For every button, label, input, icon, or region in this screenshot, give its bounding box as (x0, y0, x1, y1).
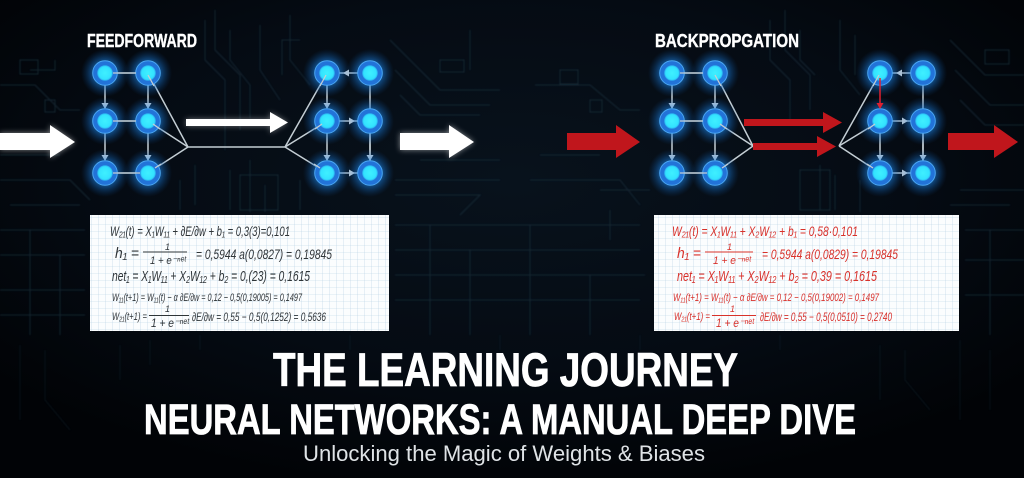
handwritten equations: backpropagation: W₂₁(t+1) = (674, 311, 710, 323)
handwritten equations: backpropagation: h₁ = (677, 245, 701, 262)
arrow: red connection (879, 78, 881, 108)
handwritten equations: feedforward: ∂E/∂w = 0,55 − 0,5(0,1252) = 0,5636 (192, 310, 326, 324)
handwritten equations: feedforward: = 0,5944 a(0,0827) = 0,19845 (196, 246, 332, 262)
title: THE LEARNING JOURNEY (273, 343, 738, 396)
handwritten equations: backpropagation: 1 + e⁻ⁿᵉᵗ (716, 316, 755, 330)
network connections: feedforward (105, 73, 370, 173)
arrow: white middle (186, 112, 288, 133)
handwritten equations: feedforward: 1 (165, 242, 170, 252)
handwritten equations: feedforward: h₁ = (115, 245, 139, 262)
handwritten equations: feedforward: W₁₁(t+1) = W₁₁(t) − α ∂E/∂w = 0,12 − 0,5(0,19005) = 0,1497 (112, 292, 303, 304)
handwritten equations: backpropagation: ∂E/∂w = 0,55 − 0,5(0,0510) = 0,2740 (760, 310, 892, 324)
network connections: backpropagation (672, 73, 923, 173)
panel: backpropagation equations (654, 215, 959, 331)
handwritten equations: backpropagation: net₁ = X₁W₁₁ + X₂W₁₂ + b₂ = 0,39 = 0,1615 (677, 268, 877, 285)
handwritten equations: backpropagation: W₁₁(t+1) = W₁₁(t) − α ∂E/∂w = 0,12 − 0,5(0,19002) = 0,1497 (673, 292, 880, 304)
tagline: Unlocking the Magic of Weights & Biases (303, 441, 705, 466)
handwritten equations: backpropagation: 1 + e⁻ⁿᵉᵗ (713, 255, 752, 267)
handwritten equations: feedforward: 1 + e⁻ⁿᵉᵗ (150, 255, 187, 267)
handwritten equations: feedforward: net₁ = X₁W₁₁ + X₂W₁₂ + b₂ = 0,(23) = 0,1615 (112, 268, 310, 285)
handwritten equations: feedforward: W₂₁(t) = X₁W₁₁ + ∂E/∂w + b₁ = 0,3(3)=0,101 (110, 223, 290, 239)
node link overlays: backpropagation (680, 73, 879, 173)
handwritten equations: backpropagation: W₂₁(t) = X₁W₁₁ + X₂W₁₂ + b₁ = 0,58·0,101 (672, 223, 858, 239)
arrow: red output (948, 125, 1018, 158)
neural network: backpropagation (648, 49, 947, 197)
heading: feedforward: FEEDFORWARD (87, 30, 197, 51)
nodes: feedforward (81, 49, 394, 197)
panel: feedforward equations (90, 215, 389, 331)
handwritten equations: backpropagation: 1 (730, 304, 735, 314)
arrow: white output (400, 125, 474, 158)
neural network: feedforward (81, 49, 394, 197)
heading: backpropagation: BACKPROPGATION (655, 30, 799, 51)
handwritten equations: feedforward: W₂₁(t+1) = (112, 311, 147, 323)
handwritten equations: feedforward: 1 (165, 304, 170, 314)
nodes: backpropagation (648, 49, 947, 197)
handwritten equations: backpropagation: = 0,5944 a(0,0829) = 0,19845 (762, 246, 898, 262)
arrow: red lower middle (753, 136, 836, 157)
arrow: red input (567, 125, 640, 158)
handwritten equations: backpropagation: 1 (727, 242, 732, 252)
handwritten equations: feedforward (110, 223, 332, 330)
handwritten equations: backpropagation (672, 223, 898, 330)
arrow: white input (0, 125, 75, 158)
arrow: red upper middle (744, 112, 842, 133)
node link overlays: feedforward (113, 73, 326, 173)
handwritten equations: feedforward: 1 + e⁻ⁿᵉᵗ (151, 316, 190, 330)
